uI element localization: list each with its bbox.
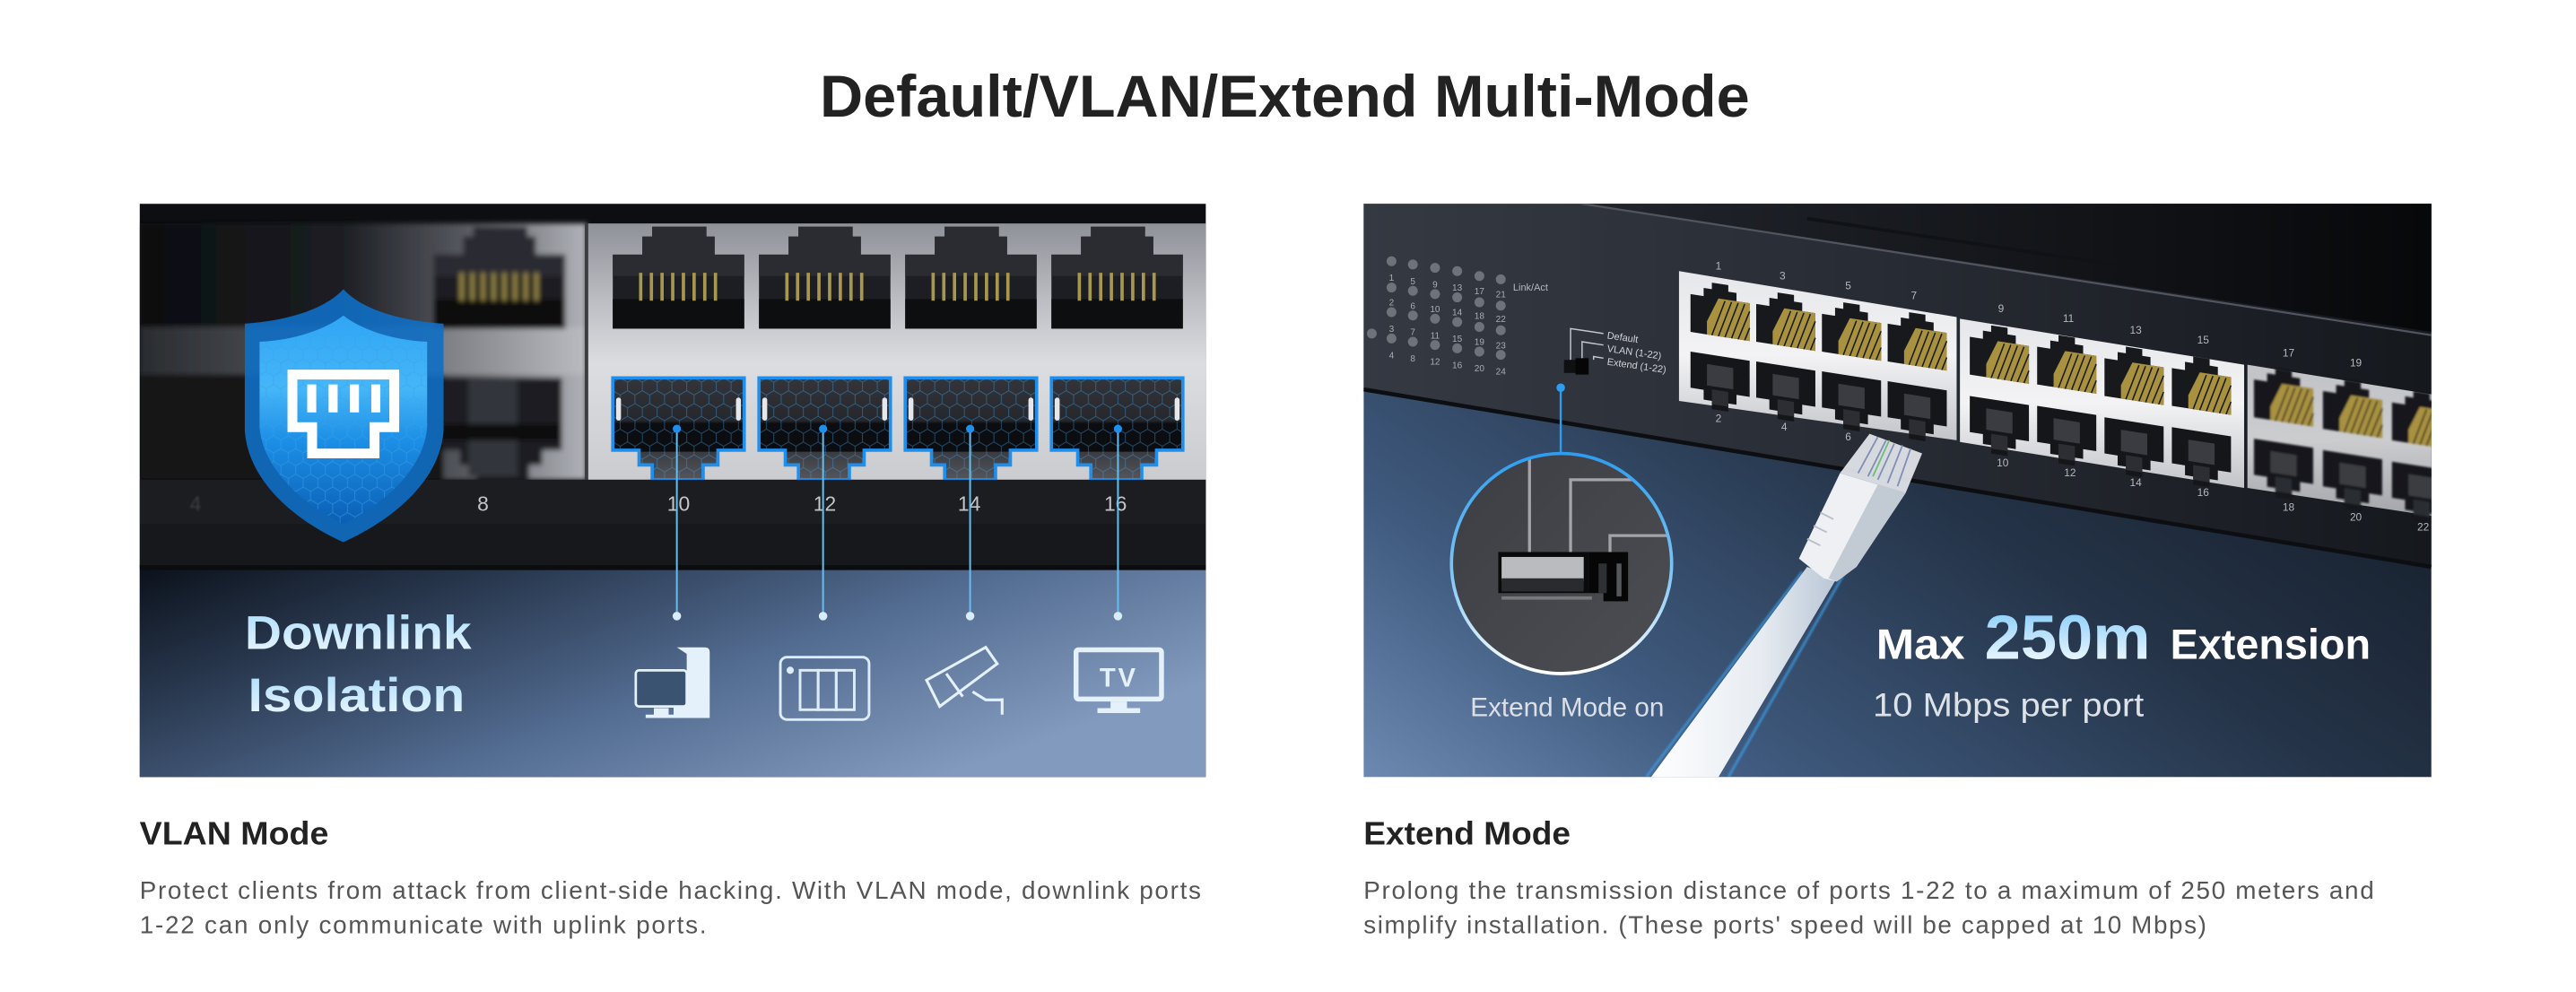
port numbers: 13 [2130, 324, 2142, 336]
LED numbers: 17 [1475, 287, 1484, 297]
port numbers: 19 [2350, 356, 2363, 369]
port numbers: 5 [1845, 279, 1851, 292]
port numbers: 17 [2283, 346, 2294, 359]
connector from switch to zoom circle [1556, 384, 1565, 454]
title: Default/VLAN/Extend Multi-Mode [820, 63, 1750, 129]
LED numbers: 14 [1452, 309, 1463, 318]
port numbers: 22 [2417, 521, 2430, 534]
icon: TV [1076, 649, 1162, 713]
text: 10 Mbps per port: 10 Mbps per port [1873, 687, 2144, 724]
LED numbers: 7 [1410, 328, 1415, 338]
mode switch legend: VLAN (1-22) [1606, 344, 1662, 361]
LED numbers: 15 [1452, 335, 1463, 344]
LED numbers: 18 [1475, 311, 1484, 321]
heading: VLAN Mode: VLAN Mode [140, 815, 328, 851]
icon: shield with ethernet port [245, 289, 444, 542]
port numbers: 14 [2130, 476, 2142, 489]
ethernet cable [1646, 434, 1922, 777]
port numbers: 15 [2197, 334, 2209, 346]
body: VLAN Mode description [140, 876, 1201, 938]
switch faceplate, blurred left side [140, 223, 587, 480]
text: Max 250m Extension: 250m [1985, 603, 2151, 673]
switch body [1363, 204, 2432, 567]
LED numbers: 13 [1452, 283, 1463, 293]
LED numbers: 20 [1475, 364, 1484, 374]
port numbers: 16 [1104, 492, 1127, 516]
port numbers: 14 [958, 492, 981, 516]
mode switch legend: Extend (1-22) [1606, 357, 1667, 376]
text: Extend Mode on: Extend Mode on [1470, 693, 1664, 723]
LED numbers: 16 [1452, 361, 1463, 370]
LED numbers: 23 [1496, 341, 1506, 351]
status LEDs [1367, 257, 1506, 360]
icon: security camera [927, 648, 1002, 715]
LED numbers: 11 [1431, 331, 1440, 341]
port numbers: 8 [477, 492, 489, 516]
LED numbers: 10 [1430, 305, 1440, 315]
LED numbers: 3 [1389, 325, 1395, 335]
panel: VLAN mode picture [140, 204, 1205, 777]
port numbers: 9 [1998, 302, 2005, 315]
LED numbers: 2 [1389, 299, 1395, 309]
text: Max 250m Extension: Extension [2171, 622, 2371, 669]
port numbers: 2 [1716, 413, 1722, 425]
port numbers: 16 [2197, 486, 2209, 499]
black front strip [140, 480, 1205, 524]
icon: NAS [780, 657, 869, 719]
text: Link/Act: Link/Act [1513, 283, 1548, 293]
LED numbers: 4 [1389, 351, 1395, 361]
text: Downlink Isolation: Downlink [245, 607, 472, 660]
LED numbers: 24 [1496, 368, 1506, 378]
port numbers: 4 [1781, 421, 1788, 433]
LED numbers: 21 [1496, 291, 1506, 300]
connector lines [673, 425, 1122, 621]
body: Extend Mode description: Prolong the transmission distance of ports 1-22 to a maximum of 250 meters and [1363, 876, 2374, 904]
port plates [1679, 271, 2432, 516]
port numbers: 12 [2064, 466, 2076, 479]
LED numbers: 5 [1410, 277, 1415, 287]
port numbers: 7 [1911, 289, 1918, 301]
port numbers: 18 [2283, 501, 2294, 514]
panel: Extend mode picture [1363, 204, 2451, 777]
text: Max 250m Extension [1876, 603, 2371, 673]
port numbers [1716, 259, 2430, 534]
highlighted ports [613, 378, 1183, 480]
LED numbers: 19 [1475, 338, 1484, 348]
LED numbers: 12 [1430, 358, 1440, 368]
LED numbers: 6 [1410, 301, 1415, 311]
silver faceplate [588, 223, 1205, 480]
port numbers: 3 [1780, 269, 1786, 282]
port numbers: 6 [1845, 431, 1851, 443]
port numbers: 12 [814, 492, 836, 516]
port numbers: 11 [2063, 312, 2075, 325]
LED numbers: 1 [1389, 274, 1395, 283]
LED numbers [1389, 274, 1506, 378]
mode switch legend: Default [1606, 330, 1639, 345]
heading: Extend Mode: Extend Mode [1363, 815, 1571, 851]
port numbers: 10 [667, 492, 690, 516]
floor gradient [140, 570, 1205, 777]
text: Max 250m Extension: Max [1876, 622, 1965, 669]
mode switch legend [1564, 328, 1667, 376]
text: Downlink Isolation: Isolation [248, 669, 465, 722]
ports: group 3 [2252, 369, 2432, 517]
top row of ports [613, 227, 1183, 328]
port numbers: 10 [1997, 457, 2009, 469]
body: VLAN Mode description: 1-22 can only communicate with uplink ports. [140, 910, 707, 938]
caption: VLAN mode [140, 815, 1201, 938]
body: Extend Mode description: simplify installation. (These ports' speed will be capped at 10 Mbps) [1363, 910, 2206, 938]
port numbers [190, 496, 1127, 511]
ports: group 1 [1691, 279, 1946, 445]
body: VLAN Mode description: Protect clients from attack from client-side hacking. With VLAN mode, downlink ports [140, 876, 1201, 904]
port numbers: 1 [1716, 259, 1722, 272]
text: Downlink Isolation [248, 614, 472, 712]
LED numbers: 22 [1496, 315, 1506, 325]
icon: desktop computer [636, 648, 709, 718]
LED numbers: 8 [1410, 354, 1415, 364]
port numbers: 20 [2350, 511, 2363, 524]
zoom circle: extend switch [1451, 444, 1684, 674]
caption: Extend mode [1363, 815, 2374, 938]
LED numbers: 9 [1432, 281, 1438, 291]
body: Extend Mode description [1363, 876, 2374, 938]
icon: TV: TV [1100, 664, 1138, 693]
ports: group 2 [1970, 322, 2231, 491]
port numbers: 4 [190, 492, 202, 516]
